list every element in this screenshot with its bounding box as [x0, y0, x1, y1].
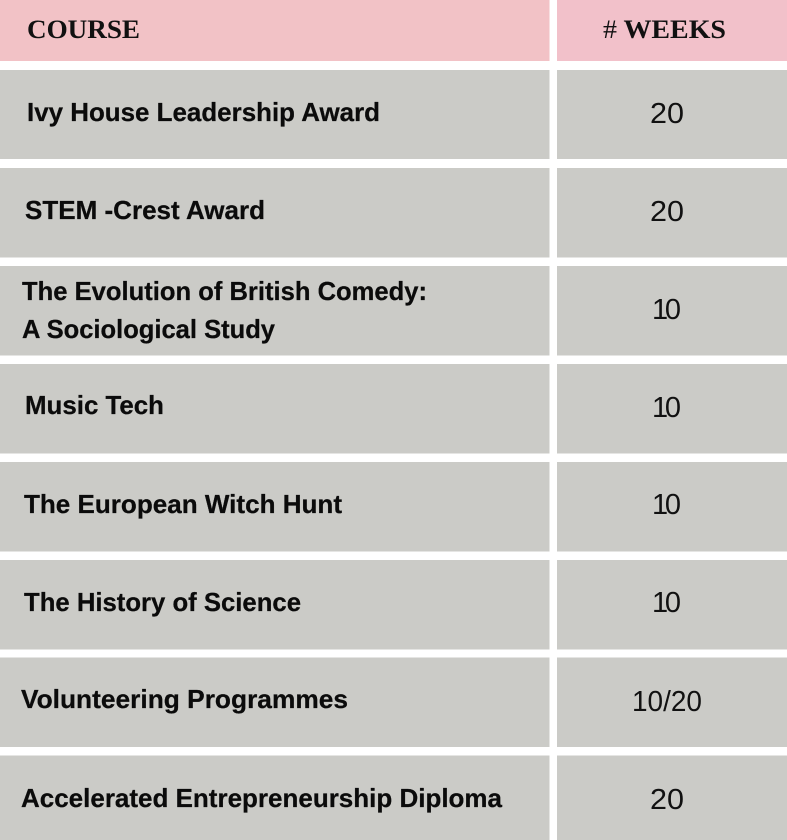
row: The Evolution of British Comedy: The Evolution of British Comedy:: [22, 276, 427, 306]
row: Accelerated Entrepreneurship Diploma: 20: [650, 784, 684, 816]
row: STEM -Crest Award: [0, 168, 787, 258]
row: The European Witch Hunt: [0, 462, 787, 552]
row: Music Tech: Music Tech: [25, 390, 164, 420]
row: The Evolution of British Comedy: A Sociological Study: [22, 314, 276, 344]
header cell: weeks: [557, 0, 787, 61]
row: Accelerated Entrepreneurship Diploma: Accelerated Entrepreneurship Diploma: [21, 783, 503, 813]
row: Ivy House Leadership Award: Ivy House Leadership Award: [27, 97, 380, 127]
row: The Evolution of British Comedy: 10: [652, 294, 681, 326]
row: STEM -Crest Award: STEM -Crest Award: [25, 195, 265, 225]
row: The European Witch Hunt: 10: [652, 489, 681, 521]
row: STEM -Crest Award: 20: [650, 196, 684, 228]
row: The History of Science: 10: [652, 587, 681, 619]
header cell: course: COURSE: [27, 15, 140, 44]
row: Volunteering Programmes: Volunteering Programmes: [21, 684, 348, 714]
row: Ivy House Leadership Award: [0, 70, 787, 159]
row: Ivy House Leadership Award: 20: [650, 98, 684, 130]
row: Music Tech: [0, 364, 787, 454]
row: The European Witch Hunt: The European Witch Hunt: [24, 489, 342, 519]
row: Volunteering Programmes: 10/20: [632, 686, 702, 718]
row: The Evolution of British Comedy: [0, 266, 787, 356]
header row: [0, 0, 787, 61]
header cell: course: [0, 0, 550, 61]
row: The History of Science: The History of Science: [24, 587, 301, 617]
row: Volunteering Programmes: [0, 658, 787, 747]
row: Music Tech: 10: [652, 392, 681, 424]
header cell: weeks: # WEEKS: [603, 15, 726, 44]
row: The History of Science: [0, 560, 787, 650]
row: Accelerated Entrepreneurship Diploma: [0, 756, 787, 840]
